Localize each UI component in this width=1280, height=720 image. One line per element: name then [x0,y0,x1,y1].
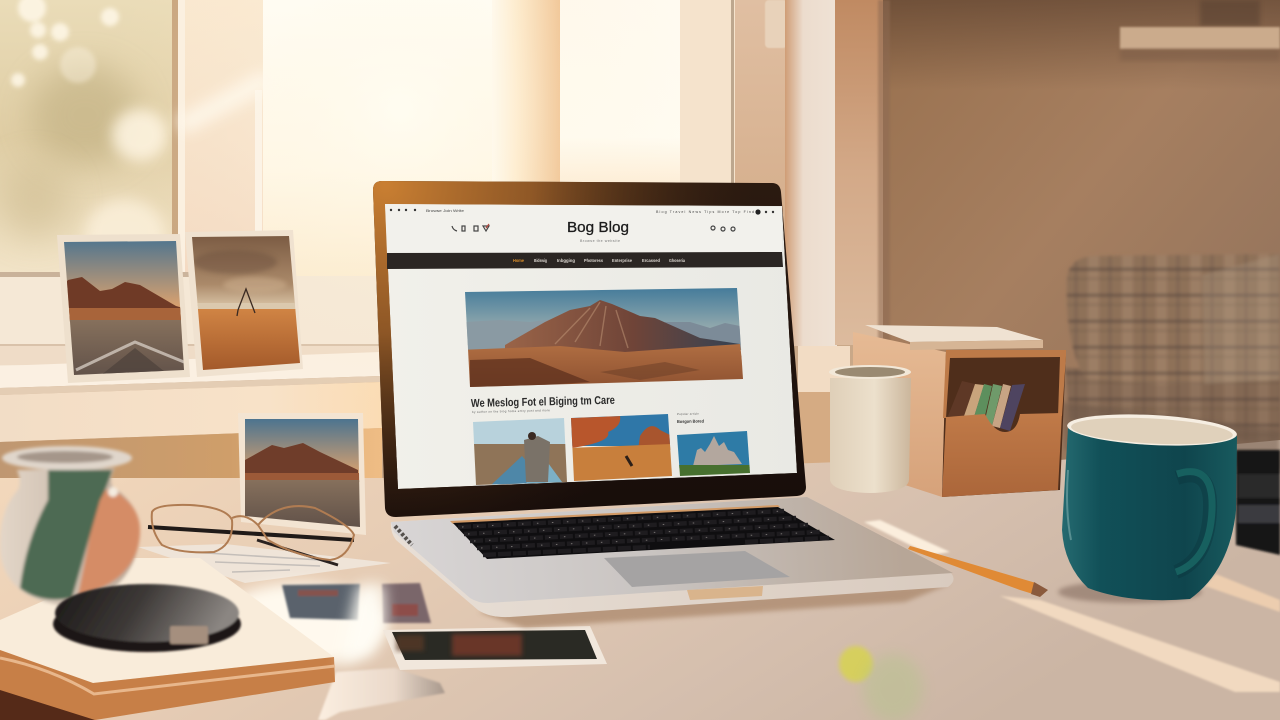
site title: Bog Blog [567,219,629,236]
hero photo: desert mountain [460,285,750,390]
article byline: by author on the blog home entry post and more [472,408,550,414]
vase [0,446,140,606]
lens flare [839,646,923,720]
right frame [680,0,736,184]
navigation bar: Photoress [584,258,603,263]
window latch [765,0,787,48]
top bar text [426,208,754,214]
colored books [948,381,1025,431]
shaded jamb [735,0,787,345]
glare on desk [340,584,386,665]
wooden shelf [1120,0,1280,61]
sunlight bloom [0,0,800,420]
front notch [687,586,763,600]
papers under the glasses [138,544,391,583]
box interior [942,352,1066,497]
reading glasses [148,505,354,565]
paper under print [318,668,445,720]
sidebar text: Popular article [677,412,699,416]
photo: volcano and lake on desk [238,413,366,535]
side ports [395,526,412,545]
wall [880,0,1280,480]
mug rim [1066,411,1238,449]
blurred photos on the desk [282,583,431,623]
bokeh highlights [11,0,119,87]
navigation bar: Enterprise [612,258,633,263]
dark device at the right edge [1236,450,1280,555]
plaid blanket [1065,254,1280,445]
navigation bar: Inbgging [557,258,575,263]
box front pocket [942,413,1062,497]
window trim [835,0,883,345]
sun ray across the mullion [175,70,280,135]
top bar icons [390,209,774,215]
dark round coaster [53,584,241,652]
thumbnail: traveller on boat [473,418,567,485]
teal mug [1058,411,1238,603]
mug handle [1176,472,1212,572]
laptop screen: blog website [385,204,797,489]
orange reflection above keyboard [450,505,780,524]
bright sunlit patch beside the book [215,583,385,667]
center window pane [263,0,492,278]
left header icons [452,224,489,231]
article headline: We Meslog Fot el Biging tm Care [471,395,615,410]
laptop base [391,497,954,617]
box rim [943,350,1066,418]
sidebar text [677,412,704,424]
navigation bar: Bidswig [534,258,547,263]
photo: desert with boat wake on sill [57,234,190,383]
center mullion [492,0,562,183]
open book [0,558,335,720]
top bar text: Blog Travel News Tips More Top Find [656,210,754,214]
wooden box organizer [853,325,1066,497]
sidebar text: Bosgon Bored [677,419,704,424]
right window pane [560,0,682,183]
photo print on desk [383,626,607,670]
page background [385,204,797,489]
right header icons [711,226,735,231]
wall shadow at the top [880,0,1280,90]
notebook on top of box [865,325,1043,350]
trackpad [604,551,790,587]
pale wall reveal [785,0,837,346]
left window pane with blurred garden [0,0,176,276]
site tagline: Browse the website [580,239,620,243]
navigation bar: Home [513,258,524,263]
cream ceramic cup [829,365,911,493]
navigation bar [387,252,783,269]
navigation bar: Ercassed [642,258,660,263]
photo: figure on amber dunes on sill [185,230,303,377]
box side [853,332,946,497]
navigation bar: Ghoseria [669,258,685,263]
sunlight strips on desk [864,520,1280,692]
left mullion [172,0,263,280]
laptop [373,181,954,617]
thumbnail: cathedral [677,431,750,476]
shadow under blanket [1062,402,1280,470]
top bar text: Browse Join Write [426,208,465,213]
thumbnail: red rock desert [571,414,672,481]
desk [0,440,1280,720]
lower window frame [0,272,380,366]
keyboard [453,507,835,559]
mug highlight [1067,470,1071,540]
pencil [908,546,1048,597]
laptop lid [373,181,806,517]
site header [385,204,782,254]
shadow under laptop [478,584,950,628]
window sill [0,346,858,490]
window [0,0,890,366]
